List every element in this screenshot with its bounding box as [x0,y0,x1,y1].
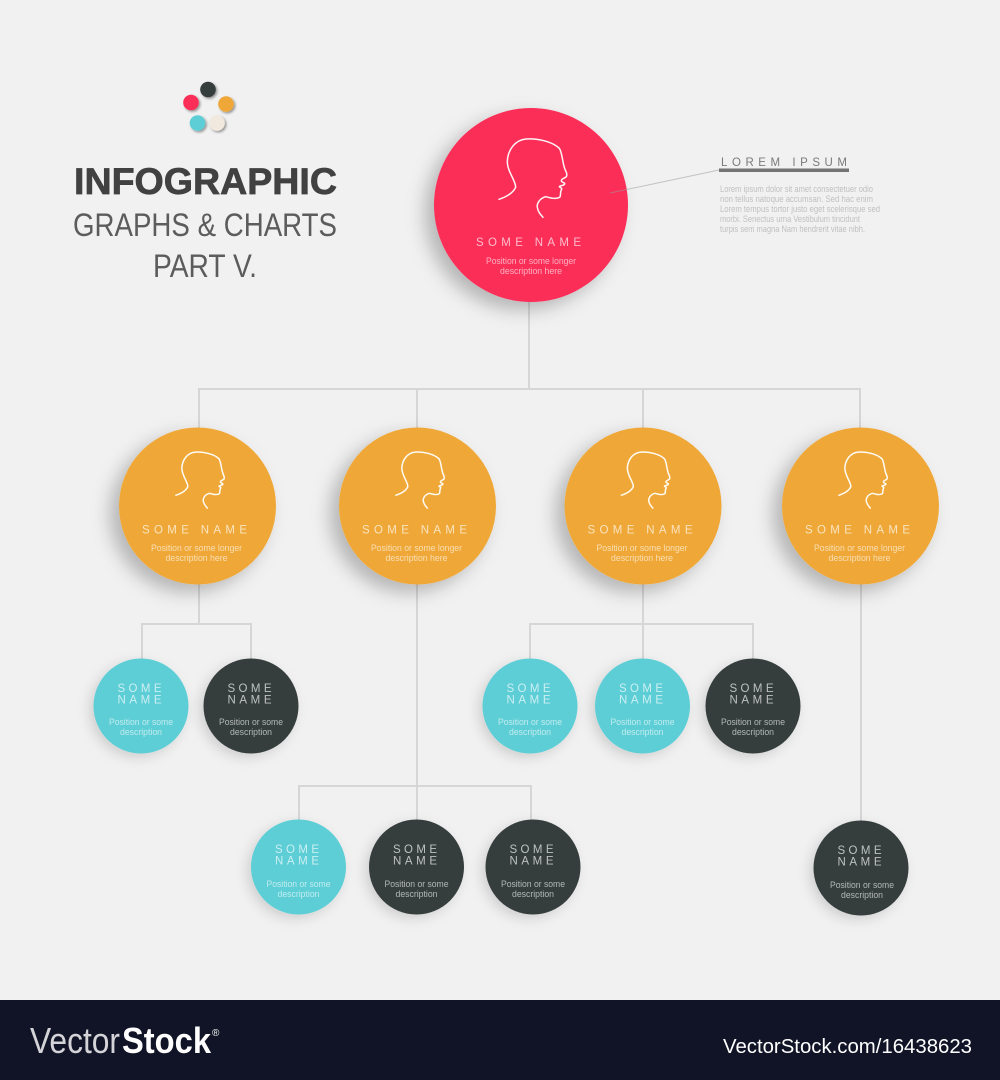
node: dark 2: NAME [730,694,774,706]
node: teal 2: Position or some [498,716,562,727]
footer bar [0,1000,1000,1080]
node: dark 1: NAME [228,694,272,706]
node: orange 3: description here [611,552,673,563]
node: orange 4: SOME NAME [805,524,910,536]
node: teal 1: SOME [118,683,162,695]
node: dark 3: SOME [393,844,437,856]
top node: red: description here [500,265,562,276]
node: dark 5: NAME [838,856,882,868]
node: orange 2 [339,428,496,584]
node: teal 4: NAME [275,856,319,868]
title: GRAPHS & CHARTS [73,207,337,243]
callout: lorem ipsum: non tellus natoque accumsan. Sed hac enim [720,194,873,204]
node: dark 5 [814,820,908,916]
node: dark 2: SOME [730,683,774,695]
callout: lorem ipsum: Lorem tempus tortor justo eget scelerisque sed [720,204,880,214]
node: dark 5: description [841,889,883,900]
node: orange 4: description here [828,552,890,563]
node: teal 1 [94,658,188,754]
node: dark 3: Position or some [384,878,448,889]
node: teal 1: Position or some [109,716,173,727]
node: teal 1: NAME [118,694,162,706]
node: orange 3 [564,428,722,584]
node: teal 2 [482,658,578,754]
node: teal 3: Position or some [610,716,674,727]
node: dark 4: SOME [510,844,554,856]
node: dark 1 [204,658,298,754]
node: teal 3 [595,658,690,754]
node: dark 4: description [512,888,554,899]
callout: lorem ipsum: Lorem ipsum dolor sit amet consectetuer odio [720,184,873,194]
footer bar: Vector [30,1020,120,1061]
node: orange 1: SOME NAME [142,524,247,536]
node: dark 1: SOME [228,683,272,695]
callout: lorem ipsum [610,157,880,234]
node: teal 4: description [278,888,320,899]
node: orange 2: description here [386,552,448,563]
node: orange 2: Position or some longer [371,542,462,553]
node: orange 1 [119,428,276,584]
node: teal 2: NAME [506,694,551,706]
footer bar: ® [212,1028,220,1039]
node: teal 3: description [622,726,664,737]
node: orange 2: SOME NAME [362,524,467,536]
node: dark 1: description [230,726,272,737]
node: orange 1: description here [166,552,228,563]
node: teal 3: SOME [619,683,663,695]
node: teal 2: SOME [506,683,551,695]
node: dark 5: Position or some [830,879,894,890]
node: dark 5: SOME [838,845,882,857]
node: dark 2: Position or some [721,716,785,727]
icon: head profile [621,452,670,508]
top node: red: Position or some longer [486,255,576,266]
node: dark 2: description [732,726,774,737]
title: INFOGRAPHIC [74,161,337,202]
icon: head profile [176,452,224,508]
node: teal 4: Position or some [266,878,330,889]
node: teal 4 [251,820,346,914]
node: teal 3: NAME [619,694,663,706]
node: teal 4: SOME [275,844,319,856]
footer bar: VectorStock.com/16438623 [723,1036,972,1058]
node: dark 3 [369,820,464,914]
logo dots [183,82,234,131]
top node: red [434,108,628,302]
node: teal 2: description [509,726,551,737]
node: dark 4 [486,820,580,914]
node: dark 4: Position or some [501,878,565,889]
callout: lorem ipsum: turpis sem magna Nam hendrerit vitae nibh. [720,224,865,234]
title [73,161,337,284]
footer bar: Stock [122,1020,212,1061]
callout: lorem ipsum: morbi. Senectus urna Vestibulum tincidunt [720,214,860,224]
node: orange 4 [782,428,939,584]
title: PART V. [153,248,257,284]
node: dark 3: description [396,888,438,899]
top node: red: SOME NAME [476,237,581,249]
node: dark 1: Position or some [219,716,283,727]
node: orange 1: Position or some longer [151,542,242,553]
icon: head profile [839,452,887,508]
node: orange 4: Position or some longer [814,542,905,553]
node: teal 1: description [120,726,162,737]
node: dark 2 [706,658,800,754]
node: orange 3: Position or some longer [596,542,688,553]
node: orange 3: SOME NAME [588,524,693,536]
icon: head profile [499,139,567,217]
callout: lorem ipsum: LOREM IPSUM [721,157,847,169]
connector lines [142,300,861,822]
icon: head profile [396,452,444,508]
node: dark 4: NAME [510,856,554,868]
node: dark 3: NAME [393,856,437,868]
